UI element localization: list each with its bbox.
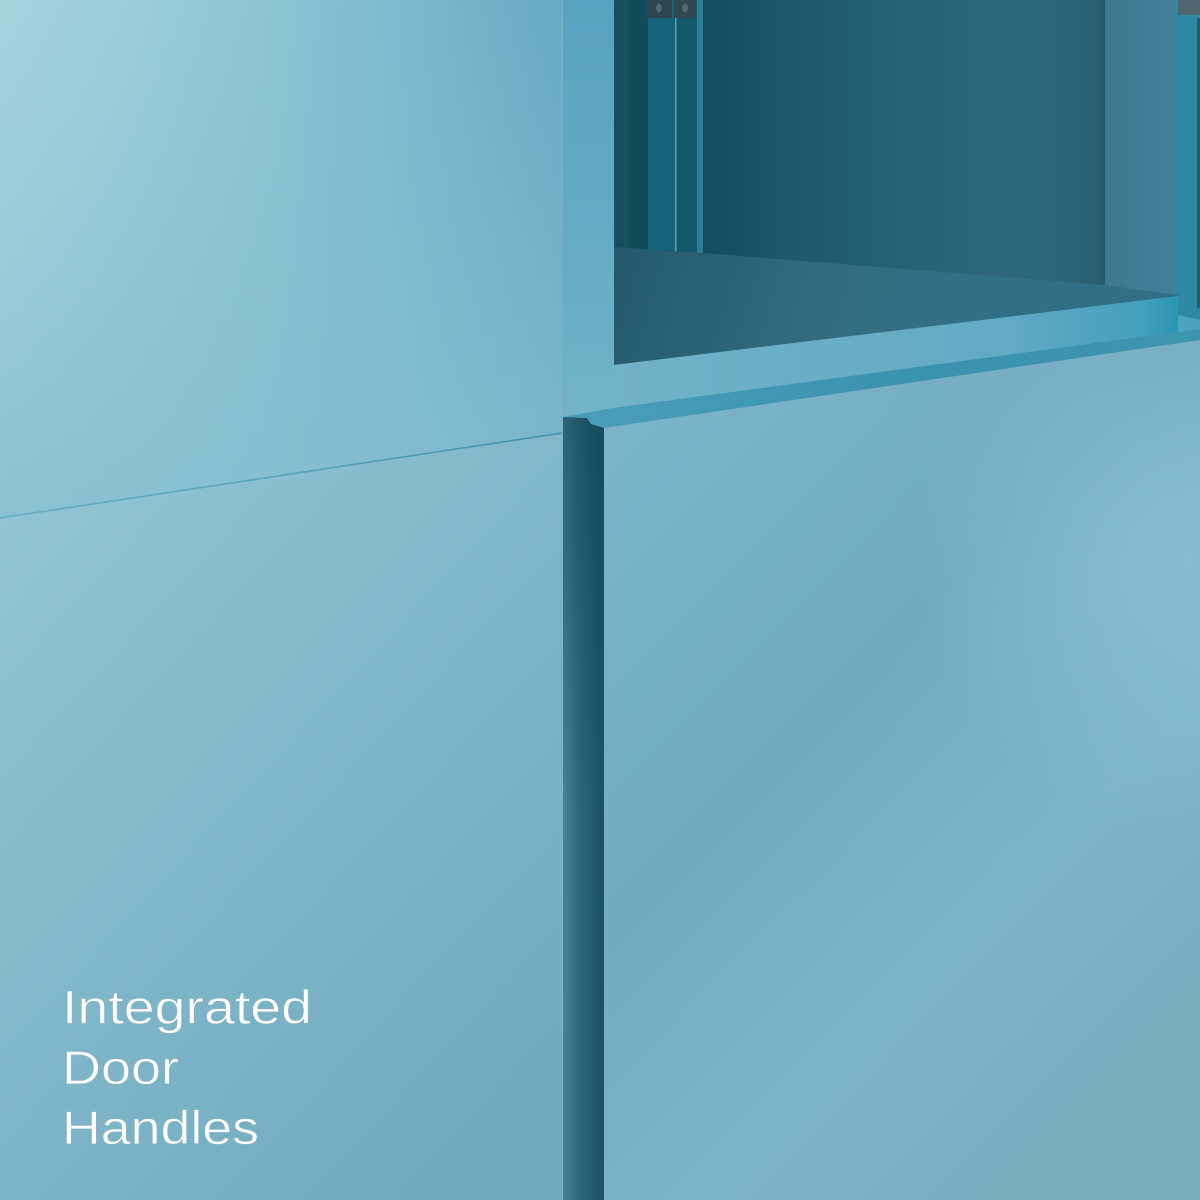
neighbouring dark reveal	[1197, 18, 1200, 308]
hinge rail posts	[614, 0, 703, 254]
neighbouring compartment edge	[1176, 0, 1200, 335]
panel: lower right door	[604, 340, 1200, 1200]
integrated door handle recess	[563, 329, 1200, 428]
hinge hardware	[647, 0, 696, 18]
right corner return	[1178, 315, 1200, 335]
caption: Integrated Door Handles	[62, 980, 312, 1154]
neighbouring hinge	[1178, 0, 1200, 15]
cabinet left inner side wall	[614, 0, 705, 260]
cabinet floor	[614, 247, 1178, 365]
panel: open cabinet compartment	[614, 0, 1200, 365]
panel: shelf front edge	[614, 296, 1178, 410]
door gap line	[0, 433, 562, 518]
panel: upper left door	[0, 0, 562, 518]
cabinet right inner side	[1105, 0, 1178, 310]
caption line 2: Door	[62, 1041, 179, 1094]
panel: lower left door	[0, 433, 562, 1200]
panel: cabinet left frame	[563, 0, 614, 422]
caption line 3: Handles	[62, 1101, 259, 1154]
cabinet back wall	[703, 0, 1105, 310]
vertical gap between doors	[563, 417, 604, 1200]
caption line 1: Integrated	[62, 980, 312, 1034]
